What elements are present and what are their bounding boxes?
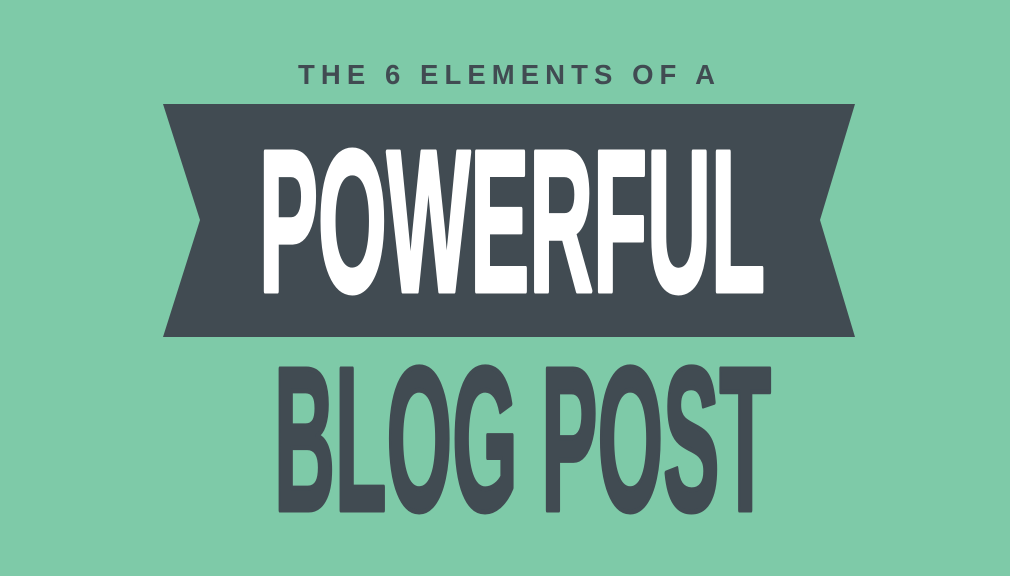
- banner ribbon: [163, 104, 855, 337]
- subtitle: the 6 elements of a: THE 6 ELEMENTS OF A: [298, 59, 715, 90]
